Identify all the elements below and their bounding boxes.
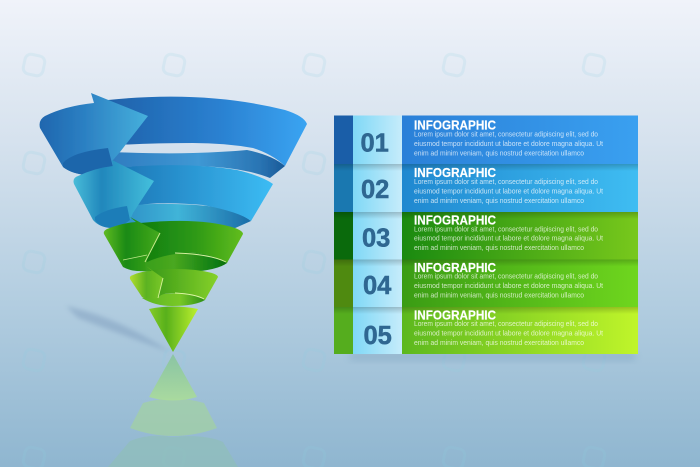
step 4: INFOGRAPHIC [414, 261, 496, 275]
step 3: enim ad minim veniam, quis nostrud exercitation ullamco [414, 243, 584, 252]
step 3 [334, 212, 638, 260]
step 2: eiusmod tempor incididunt ut labore et dolore magna aliqua. Ut [414, 186, 603, 196]
step 1: INFOGRAPHIC [414, 118, 496, 132]
funnel cast shadow [66, 306, 170, 352]
step 3: 03 [362, 225, 390, 253]
tier 2 inner ribbon [118, 204, 251, 230]
step 5: enim ad minim veniam, quis nostrud exercitation ullamco [414, 338, 584, 347]
tier 1 arrow [40, 93, 148, 175]
tier 4 inner ribbon [142, 293, 205, 306]
tier 3 outer band [140, 221, 243, 263]
step 1: Lorem ipsum dolor sit amet, consectetur adipiscing elit, sed do [414, 130, 598, 138]
step 1: eiusmod tempor incididunt ut labore et dolore magna aliqua. Ut [414, 139, 603, 148]
tier 2 arrow fold [95, 206, 130, 228]
tier 1 arrow fold [63, 148, 113, 175]
step 4: 04 [363, 272, 392, 300]
step 3: INFOGRAPHIC [414, 214, 496, 228]
tier 2 arrow [74, 160, 154, 228]
step 1 [334, 116, 638, 164]
step 4 [334, 260, 638, 307]
step 4: enim ad minim veniam, quis nostrud exercitation ullamco [414, 290, 584, 300]
funnel reflection [108, 354, 238, 467]
tier 1 blue ribbon [40, 93, 307, 178]
step 5: eiusmod tempor incididunt ut labore et dolore magna aliqua. Ut [414, 328, 603, 338]
tier 5 cone tip [149, 306, 198, 352]
steps panel [334, 116, 638, 354]
step 2 [334, 164, 638, 212]
step 4: eiusmod tempor incididunt ut labore et dolore magna aliqua. Ut [414, 281, 603, 290]
tier 3 arrow [104, 217, 160, 271]
tier 2 outer band [125, 165, 273, 221]
step 1: 01 [360, 130, 389, 158]
step 4: Lorem ipsum dolor sit amet, consectetur adipiscing elit, sed do [414, 272, 598, 280]
step 2: Lorem ipsum dolor sit amet, consectetur adipiscing elit, sed do [414, 177, 598, 186]
step 2: INFOGRAPHIC [414, 166, 496, 180]
tier 2 cyan ribbon [74, 160, 273, 230]
tier 4 outer band [150, 269, 218, 300]
step 2: enim ad minim veniam, quis nostrud exercitation ullamco [414, 196, 584, 205]
funnel [40, 93, 307, 352]
reflected middle band [130, 398, 217, 436]
step 2: 02 [361, 176, 389, 204]
tier 1 inner ribbon [112, 150, 285, 178]
reflected cone [149, 354, 197, 400]
step 3: eiusmod tempor incididunt ut labore et dolore magna aliqua. Ut [414, 234, 603, 242]
watermark pattern [22, 53, 606, 467]
step 5 [334, 307, 638, 354]
panel drop shadow [350, 353, 635, 360]
step 5: Lorem ipsum dolor sit amet, consectetur adipiscing elit, sed do [414, 319, 598, 328]
tier 3 inner ribbon [130, 253, 227, 272]
tier 1 outer band [108, 97, 307, 166]
step 5: 05 [364, 322, 392, 350]
step 3: Lorem ipsum dolor sit amet, consectetur adipiscing elit, sed do [414, 224, 598, 234]
step 1: enim ad minim veniam, quis nostrud exercitation ullamco [414, 148, 584, 158]
tier 4 light green ribbon [130, 266, 218, 306]
step 5: INFOGRAPHIC [414, 308, 496, 322]
tier 4 arrow [130, 266, 163, 299]
tier 3 dark green ribbon [104, 217, 243, 272]
reflected bottom band [108, 436, 238, 467]
